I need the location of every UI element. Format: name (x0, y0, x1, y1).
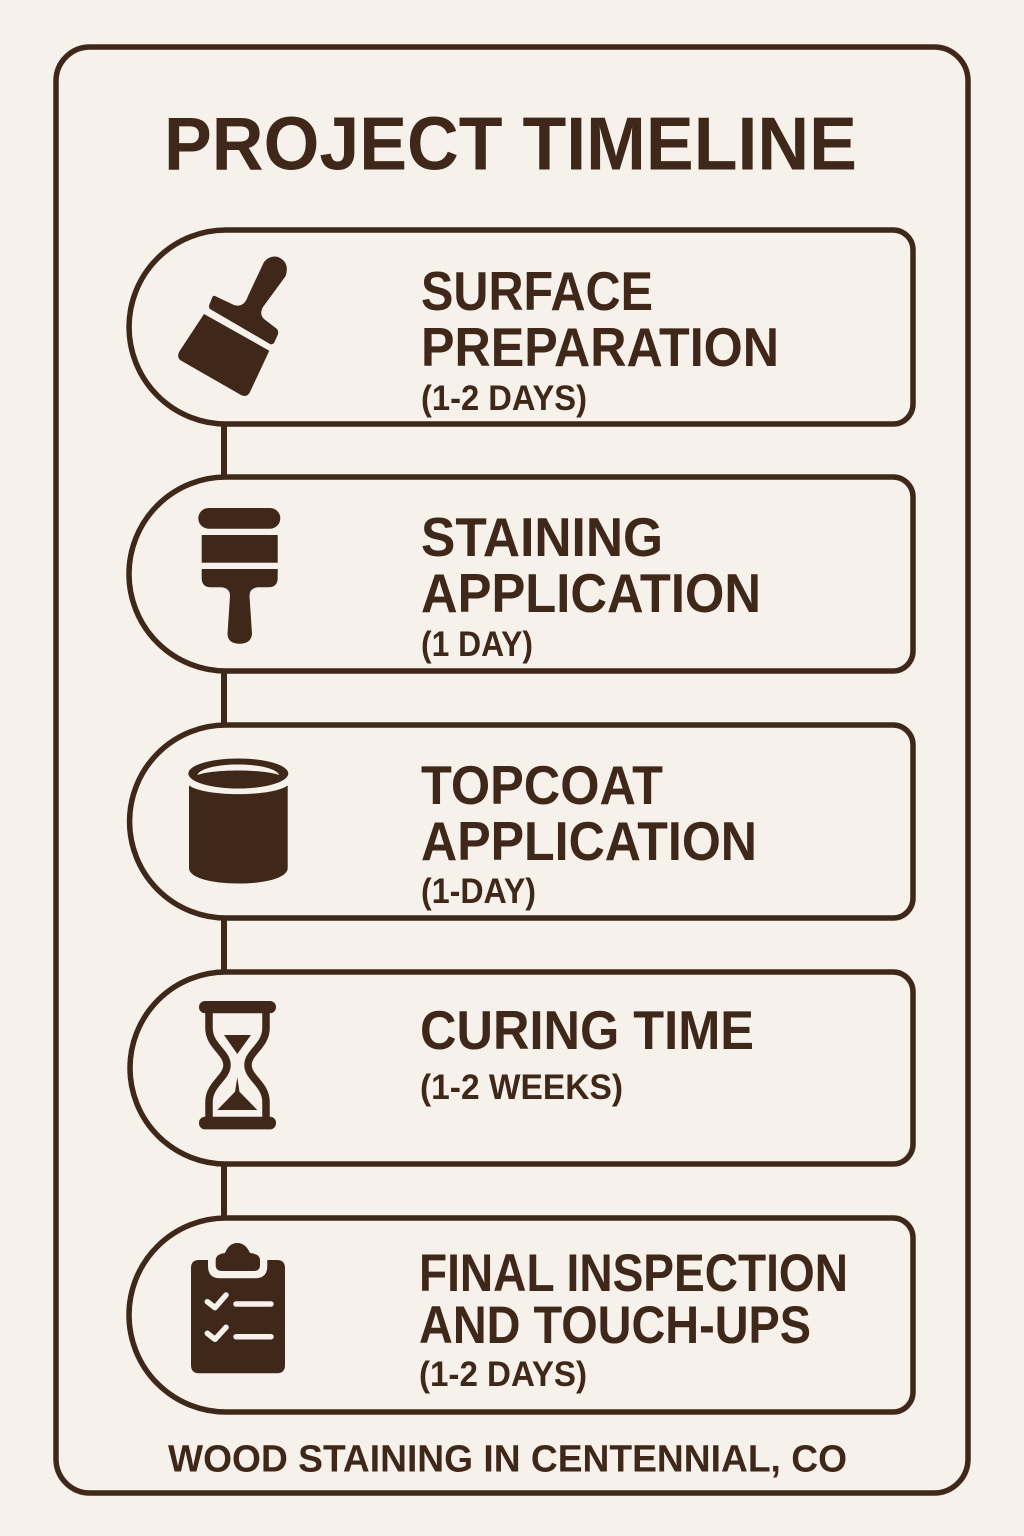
icon: upright paint brush (198, 508, 280, 644)
footer: WOOD STAINING IN CENTENNIAL, CO (168, 1439, 847, 1481)
icon: clipboard checklist (191, 1243, 285, 1373)
duration: (1-2 WEEKS) (420, 1068, 623, 1107)
icon: hourglass (199, 1001, 276, 1129)
duration: (1-DAY) (421, 872, 536, 911)
title: PROJECT TIMELINE (164, 102, 857, 186)
heading: topcoat: TOPCOAT (421, 754, 663, 816)
panel: topcoat application (130, 725, 913, 918)
heading line two: PREPARATION (421, 316, 779, 378)
heading line two: AND TOUCH-UPS (419, 1296, 811, 1355)
icon: can of topcoat (188, 758, 288, 884)
duration: (1-2 DAYS) (419, 1355, 587, 1394)
heading: curing time: CURING TIME (420, 999, 754, 1061)
heading: surface preparation: SURFACE (421, 260, 653, 322)
icon: angled paint brush (178, 257, 287, 396)
panel: surface preparation (129, 230, 913, 424)
connectors between steps (221, 424, 227, 1218)
panel: curing time (130, 972, 913, 1164)
panel: staining application (129, 477, 913, 671)
duration: (1 DAY) (421, 625, 533, 664)
heading: staining: STAINING (421, 506, 663, 568)
heading line two: APPLICATION (421, 810, 757, 872)
heading line two: APPLICATION (421, 562, 761, 624)
panel: final inspection (129, 1218, 913, 1412)
heading: final inspection: FINAL INSPECTION (419, 1244, 848, 1303)
duration: (1-2 DAYS) (421, 379, 587, 418)
